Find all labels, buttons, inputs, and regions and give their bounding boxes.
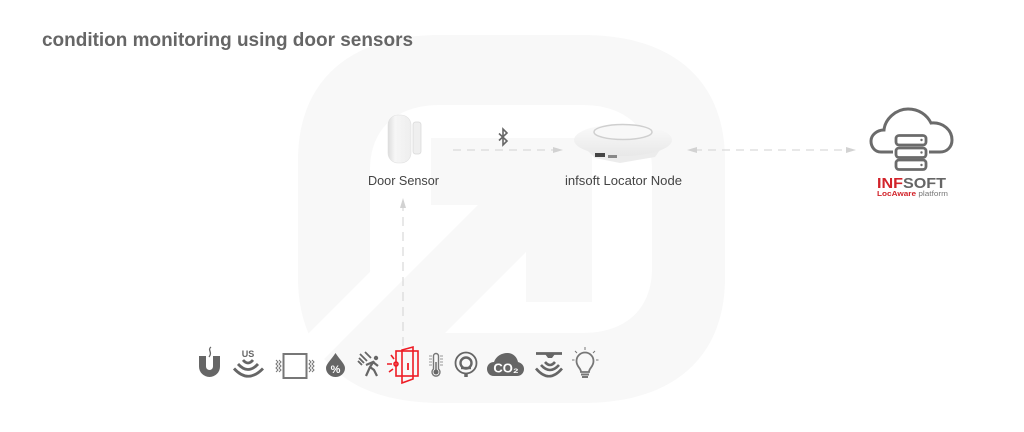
icon row: sensor types [202, 347, 598, 383]
arrow: door icon to door sensor [400, 198, 406, 346]
icon: ceiling infrared sensor [536, 354, 562, 376]
icon: ultrasonic: US [242, 349, 254, 359]
icon: light bulb [572, 347, 598, 377]
icon: infsoft locator node [574, 124, 672, 163]
label: infsoft locator node: infsoft Locator Node [565, 173, 682, 188]
icon: door (active, red) [387, 347, 418, 383]
icon: cloud with servers [871, 109, 952, 170]
background logo watermark [290, 35, 725, 403]
logo: infsoft LocAware platform [877, 175, 948, 198]
logo: infsoft LocAware platform: INFSOFT [877, 175, 946, 192]
icon: door sensor device [388, 115, 421, 163]
icon: humidity drop: % [331, 364, 341, 376]
icon: ultrasonic [234, 349, 263, 376]
icon: CO2 cloud: CO₂ [493, 360, 519, 376]
icon: bluetooth [499, 129, 507, 145]
arrow: locator node to cloud [687, 147, 856, 153]
icon: CO2 cloud [487, 353, 524, 376]
icon: vibration box [276, 354, 314, 378]
icon: thermometer [429, 354, 443, 376]
label: door sensor: Door Sensor [368, 173, 440, 188]
icon: humidity drop [326, 353, 345, 377]
icon: magnet [202, 347, 217, 374]
title: condition monitoring using door sensors [42, 29, 413, 51]
logo: infsoft LocAware platform: LocAware platform [877, 191, 948, 198]
icon: motion [358, 352, 378, 376]
arrow: door sensor to locator node [453, 147, 563, 153]
icon: pressure gauge [456, 352, 476, 377]
